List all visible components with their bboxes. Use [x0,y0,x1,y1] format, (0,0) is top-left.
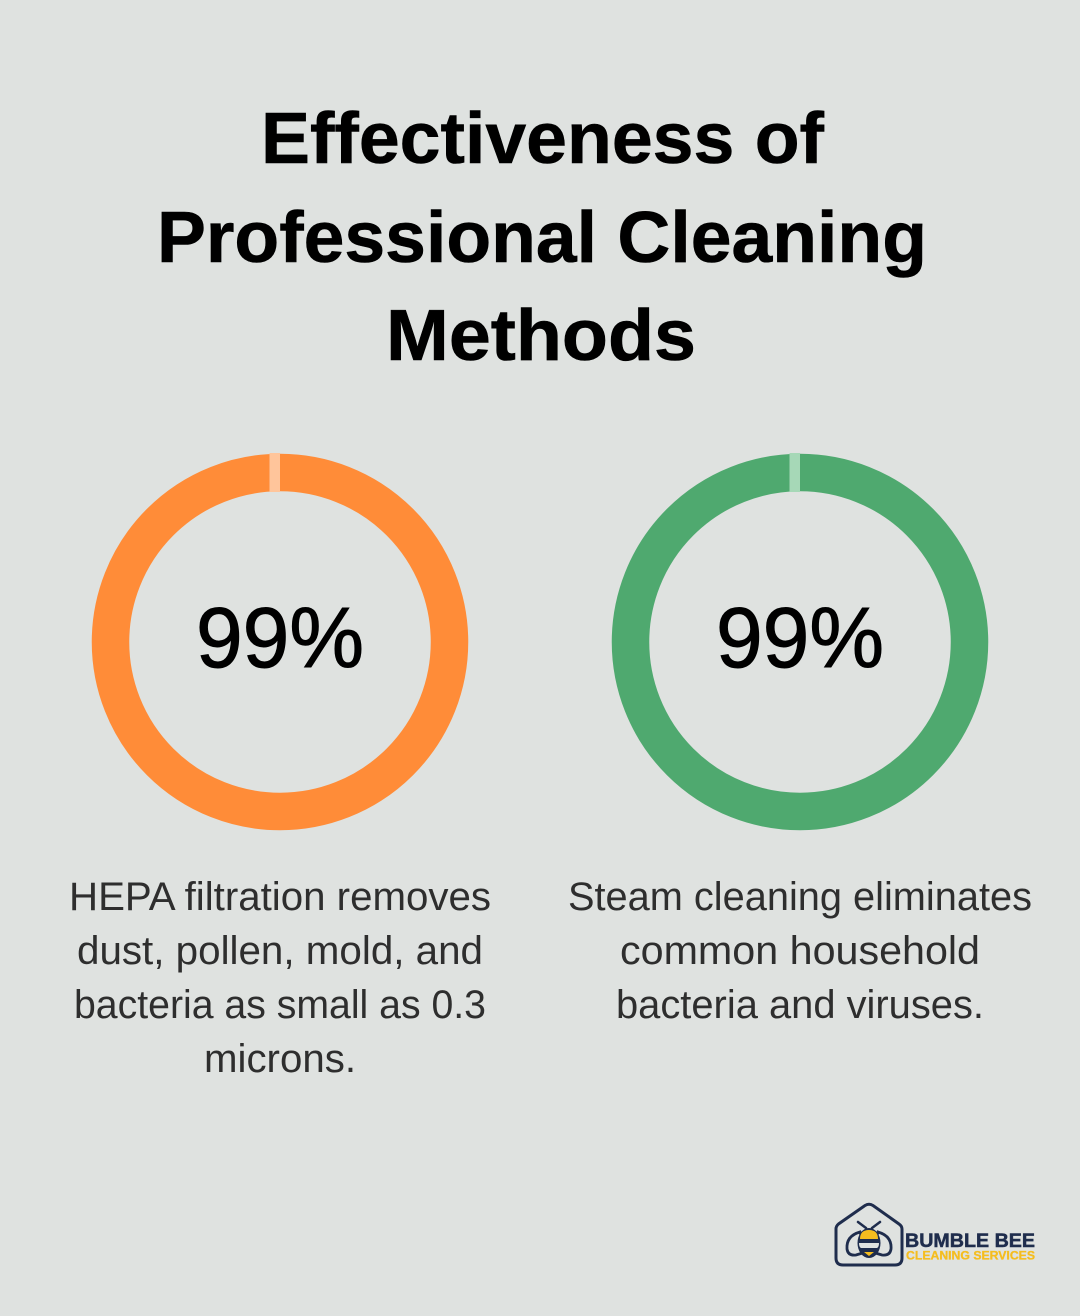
title: Professional Cleaning [157,198,927,278]
donut chart: orange 99% [110,453,450,812]
panel: HEPA filtration [69,453,491,1081]
logo tagline: CLEANING SERVICES [906,1248,1035,1262]
text block: HEPA description: dust, pollen, mold, and [77,929,483,973]
title [157,99,927,376]
text block: steam description: Steam cleaning eliminates [568,875,1032,919]
panel: steam cleaning [568,453,1032,1027]
text block: steam description: bacteria and viruses. [616,983,984,1027]
value: green 99%: 99% [716,591,884,686]
text block: HEPA description: HEPA filtration removes [69,875,491,919]
icon: house with bee [836,1204,902,1265]
text block: steam description [568,875,1032,1027]
logo: Bumble Bee Cleaning Services [836,1204,1035,1265]
value: orange 99%: 99% [196,591,364,686]
text block: steam description: common household [620,929,980,973]
text block: HEPA description [69,875,491,1081]
text block: HEPA description: bacteria as small as 0.3 [74,983,486,1027]
title: Methods [386,296,696,376]
logo wordmark: BUMBLE BEE [905,1230,1035,1252]
title: Effectiveness of [261,99,825,179]
text block: HEPA description: microns. [204,1037,356,1081]
donut chart: green 99% [630,453,970,812]
